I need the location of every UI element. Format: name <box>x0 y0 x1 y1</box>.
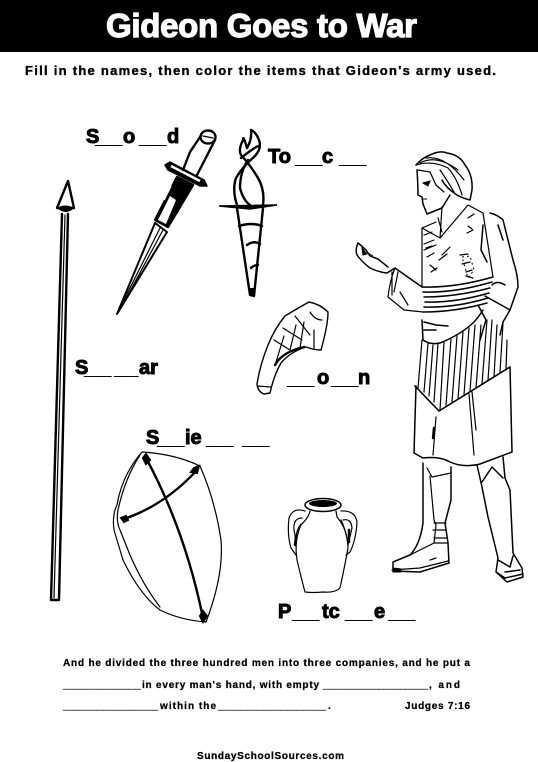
label: spear: ar <box>139 357 158 379</box>
label: horn: _ <box>286 360 302 390</box>
scripture verse: ___________________ <box>322 680 428 691</box>
label: torch: _ <box>351 139 367 169</box>
footer website: SundaySchoolSources.com <box>197 751 344 762</box>
label: horn: _ <box>299 360 315 390</box>
label: spear: _ <box>96 350 112 380</box>
label: horn: _ <box>343 360 359 390</box>
label: spear: _ <box>113 350 129 380</box>
label: pitcher: _ <box>344 594 360 624</box>
scripture verse: . <box>328 701 331 712</box>
label: pitcher: _ <box>400 594 416 624</box>
label: horn: n <box>358 367 370 389</box>
scripture verse: , and <box>429 680 460 691</box>
label: sword: _ <box>151 119 167 149</box>
icon: pitcher <box>288 498 357 592</box>
label: spear: S <box>75 357 88 379</box>
icon: shield <box>113 452 221 622</box>
label: torch: To <box>268 146 291 168</box>
label: sword: _ <box>94 119 110 149</box>
scripture verse: _________________ <box>62 701 158 712</box>
label: pitcher: P <box>278 601 291 623</box>
label: torch: _ <box>307 139 323 169</box>
scripture verse: ___________________ <box>217 701 326 712</box>
scripture verse: within the <box>159 701 216 712</box>
label: spear: _ <box>83 350 99 380</box>
label: torch: _ <box>338 139 354 169</box>
label: shield: _ <box>156 420 172 450</box>
tunic skirt <box>414 367 512 466</box>
label: shield: _ <box>218 420 234 450</box>
label: shield: _ <box>254 420 270 450</box>
icon: spear <box>51 181 74 600</box>
label: torch: c <box>322 146 333 168</box>
label: shield: _ <box>241 420 257 450</box>
sash <box>422 277 493 312</box>
scripture verse: ______________ <box>62 680 141 691</box>
icon: sword <box>117 130 216 314</box>
title banner <box>0 0 538 52</box>
label: sword: _ <box>107 119 123 149</box>
title banner: Gideon Goes to War <box>106 7 417 44</box>
label: sword: d <box>167 126 179 148</box>
label: sword: o <box>123 126 135 148</box>
label: pitcher: _ <box>304 594 320 624</box>
label: sword: S <box>86 126 99 148</box>
icon: torch <box>219 130 277 297</box>
scripture verse: And he divided the three hundred men into three companies, and he put a <box>63 658 470 669</box>
scripture verse: Judges 7:16 <box>405 701 470 712</box>
label: shield: _ <box>169 420 185 450</box>
scripture verse: in every man's hand, with empty <box>142 680 319 691</box>
vest and torso <box>422 205 493 287</box>
label: shield: S <box>146 427 159 449</box>
hair and head <box>416 152 472 214</box>
sleeves and arms <box>356 213 518 344</box>
label: horn: _ <box>330 360 346 390</box>
label: horn: o <box>317 367 329 389</box>
legs and boots <box>392 457 523 582</box>
icon: horn <box>257 302 328 394</box>
instructions: Fill in the names, then color the items that Gideon's army used. <box>25 63 496 78</box>
label: shield: _ <box>205 420 221 450</box>
label: spear: _ <box>123 350 139 380</box>
striped apron <box>415 320 510 411</box>
label: shield: ie <box>185 427 202 449</box>
label: pitcher: _ <box>291 594 307 624</box>
label: pitcher: e <box>374 601 385 623</box>
label: pitcher: _ <box>357 594 373 624</box>
label: pitcher: _ <box>387 594 403 624</box>
illustration: Gideon <box>356 152 523 582</box>
label: sword: _ <box>138 119 154 149</box>
scripture verse <box>62 658 470 712</box>
label: torch: _ <box>294 139 310 169</box>
label: pitcher: tc <box>322 601 340 623</box>
